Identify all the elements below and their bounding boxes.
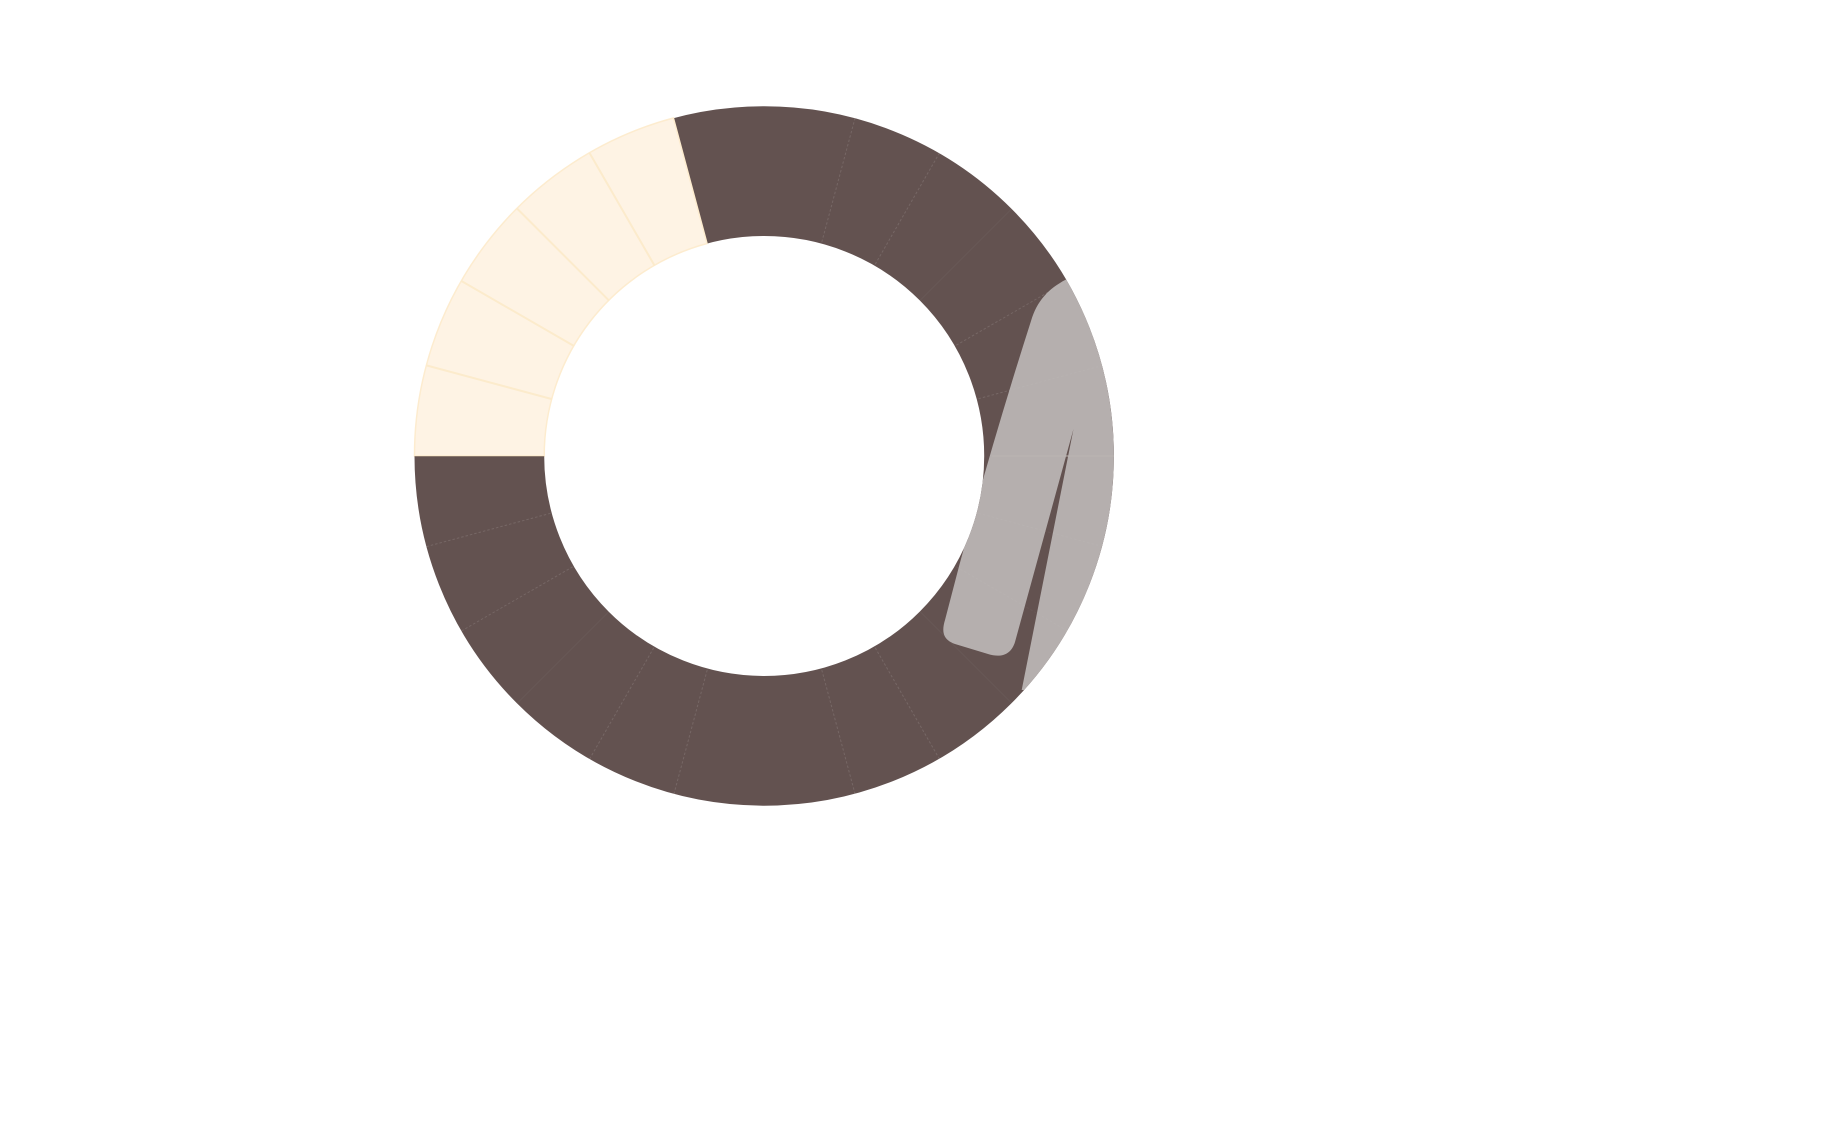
- cream ring segments: [414, 118, 707, 456]
- donut chart: [414, 106, 1114, 806]
- grey overlay shape: [943, 280, 1114, 690]
- dark ring segments: [426, 118, 1103, 794]
